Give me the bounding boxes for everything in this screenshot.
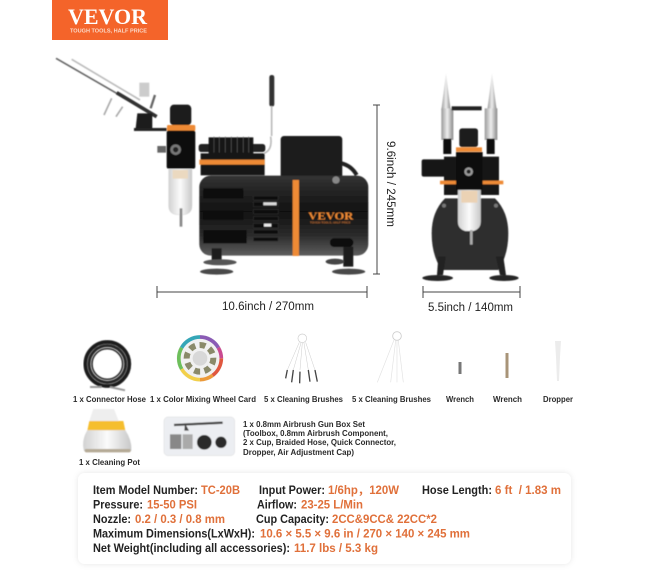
row: nozzle, cup capacity: 0.2 / 0.3 / 0.8 mm [135,514,225,526]
accessory: cleaning brushes dark [286,334,317,383]
row: net weight: 11.7 lbs / 5.3 kg [294,543,378,555]
row: maximum dimensions: Maximum Dimensions(LxWxH): [93,528,255,540]
text: airbrush gun box contents: Dropper, Air Adjustment Cap) [243,447,354,457]
motor cover [281,136,357,181]
label: color mixing wheel card: 1 x Color Mixing Wheel Card [150,394,256,404]
dimension: height 245mm [373,105,396,274]
row: model, power, hose: 1/6hp，120W [328,485,399,497]
tank body [199,176,368,256]
row: model, power, hose: TC-20B [201,485,240,497]
row: model, power, hose: Item Model Number: [93,485,198,497]
dimension: width 270mm [157,286,367,313]
panel: specifications [78,473,571,564]
product image: air compressor side view with airbrush [56,58,368,275]
row: nozzle, cup capacity: Cup Capacity: [256,514,329,526]
label: cleaning brushes: 5 x Cleaning Brushes [352,394,431,404]
dimension: depth 140mm [423,286,520,314]
row: nozzle, cup capacity: 2CC&9CC& 22CC*2 [332,514,437,526]
pressure cylinder with fins [199,137,265,187]
label: cleaning brushes: 5 x Cleaning Brushes [264,394,343,404]
text: airbrush gun box contents: (Toolbox, 0.8mm Airbrush Component, [243,428,388,438]
regulator [456,128,483,245]
row: nozzle, cup capacity [93,514,437,526]
feet [422,257,519,281]
tank body: TOUGH TOOLS, HALF PRICE [310,221,351,225]
product image: compressor front view [422,73,519,281]
logo: VEVOR [52,0,168,40]
row: maximum dimensions [93,528,470,540]
accessory: connector hose [85,342,129,390]
row: model, power, hose: Input Power: [259,485,325,497]
logo: VEVOR: VEVOR [68,4,148,29]
row: net weight: Net Weight(including all accessories): [93,543,290,555]
dimension: depth 140mm: 5.5inch / 140mm [428,302,513,314]
accessory: dropper [555,341,561,381]
handle [264,75,274,153]
row: maximum dimensions: 10.6 × 5.5 × 9.6 in / 270 × 140 × 245 mm [260,528,470,540]
airbrushes upright [441,73,497,154]
airbrush [56,58,167,131]
row: pressure, airflow: 15-50 PSI [147,500,197,512]
accessory: color mixing wheel [177,335,223,382]
row: model, power, hose [93,485,561,497]
row: model, power, hose: Hose Length: [422,485,492,497]
accessory: wrench small [458,362,462,374]
row: pressure, airflow [93,500,363,512]
tank body: VEVOR [308,211,355,223]
accessory: cleaning brushes light [377,332,403,382]
rubber feet [200,247,365,275]
label: wrench: Wrench [446,394,474,404]
dimension: height 245mm: 9.6inch / 245mm [384,141,396,227]
row: nozzle, cup capacity: Nozzle: [93,514,131,526]
accessory: wrench long [506,353,508,378]
row: pressure, airflow: Airflow: [257,500,297,512]
row: pressure, airflow: Pressure: [93,500,143,512]
text: airbrush gun box contents: 1 x 0.8mm Airbrush Gun Box Set [243,419,365,429]
dimension: width 270mm: 10.6inch / 270mm [222,301,314,313]
label: dropper: Dropper [543,394,574,404]
row: model, power, hose: 6 ft / 1.83 m [495,485,561,497]
accessory: cleaning pot [83,409,131,452]
accessory: airbrush gun box [164,417,235,456]
text: airbrush gun box contents [243,419,396,457]
cylinder and gauge [422,157,503,195]
row: pressure, airflow: 23-25 L/Min [301,500,363,512]
logo: VEVOR: TOUGH TOOLS, HALF PRICE [70,28,147,34]
text: airbrush gun box contents: 2 x Cup, Braided Hose, Quick Connector, [243,437,396,447]
label: connector hose: 1 x Connector Hose [73,394,146,404]
label: wrench: Wrench [493,394,522,404]
tank front [432,198,508,270]
label: cleaning pot: 1 x Cleaning Pot [79,457,140,467]
regulator and filter [157,105,195,227]
